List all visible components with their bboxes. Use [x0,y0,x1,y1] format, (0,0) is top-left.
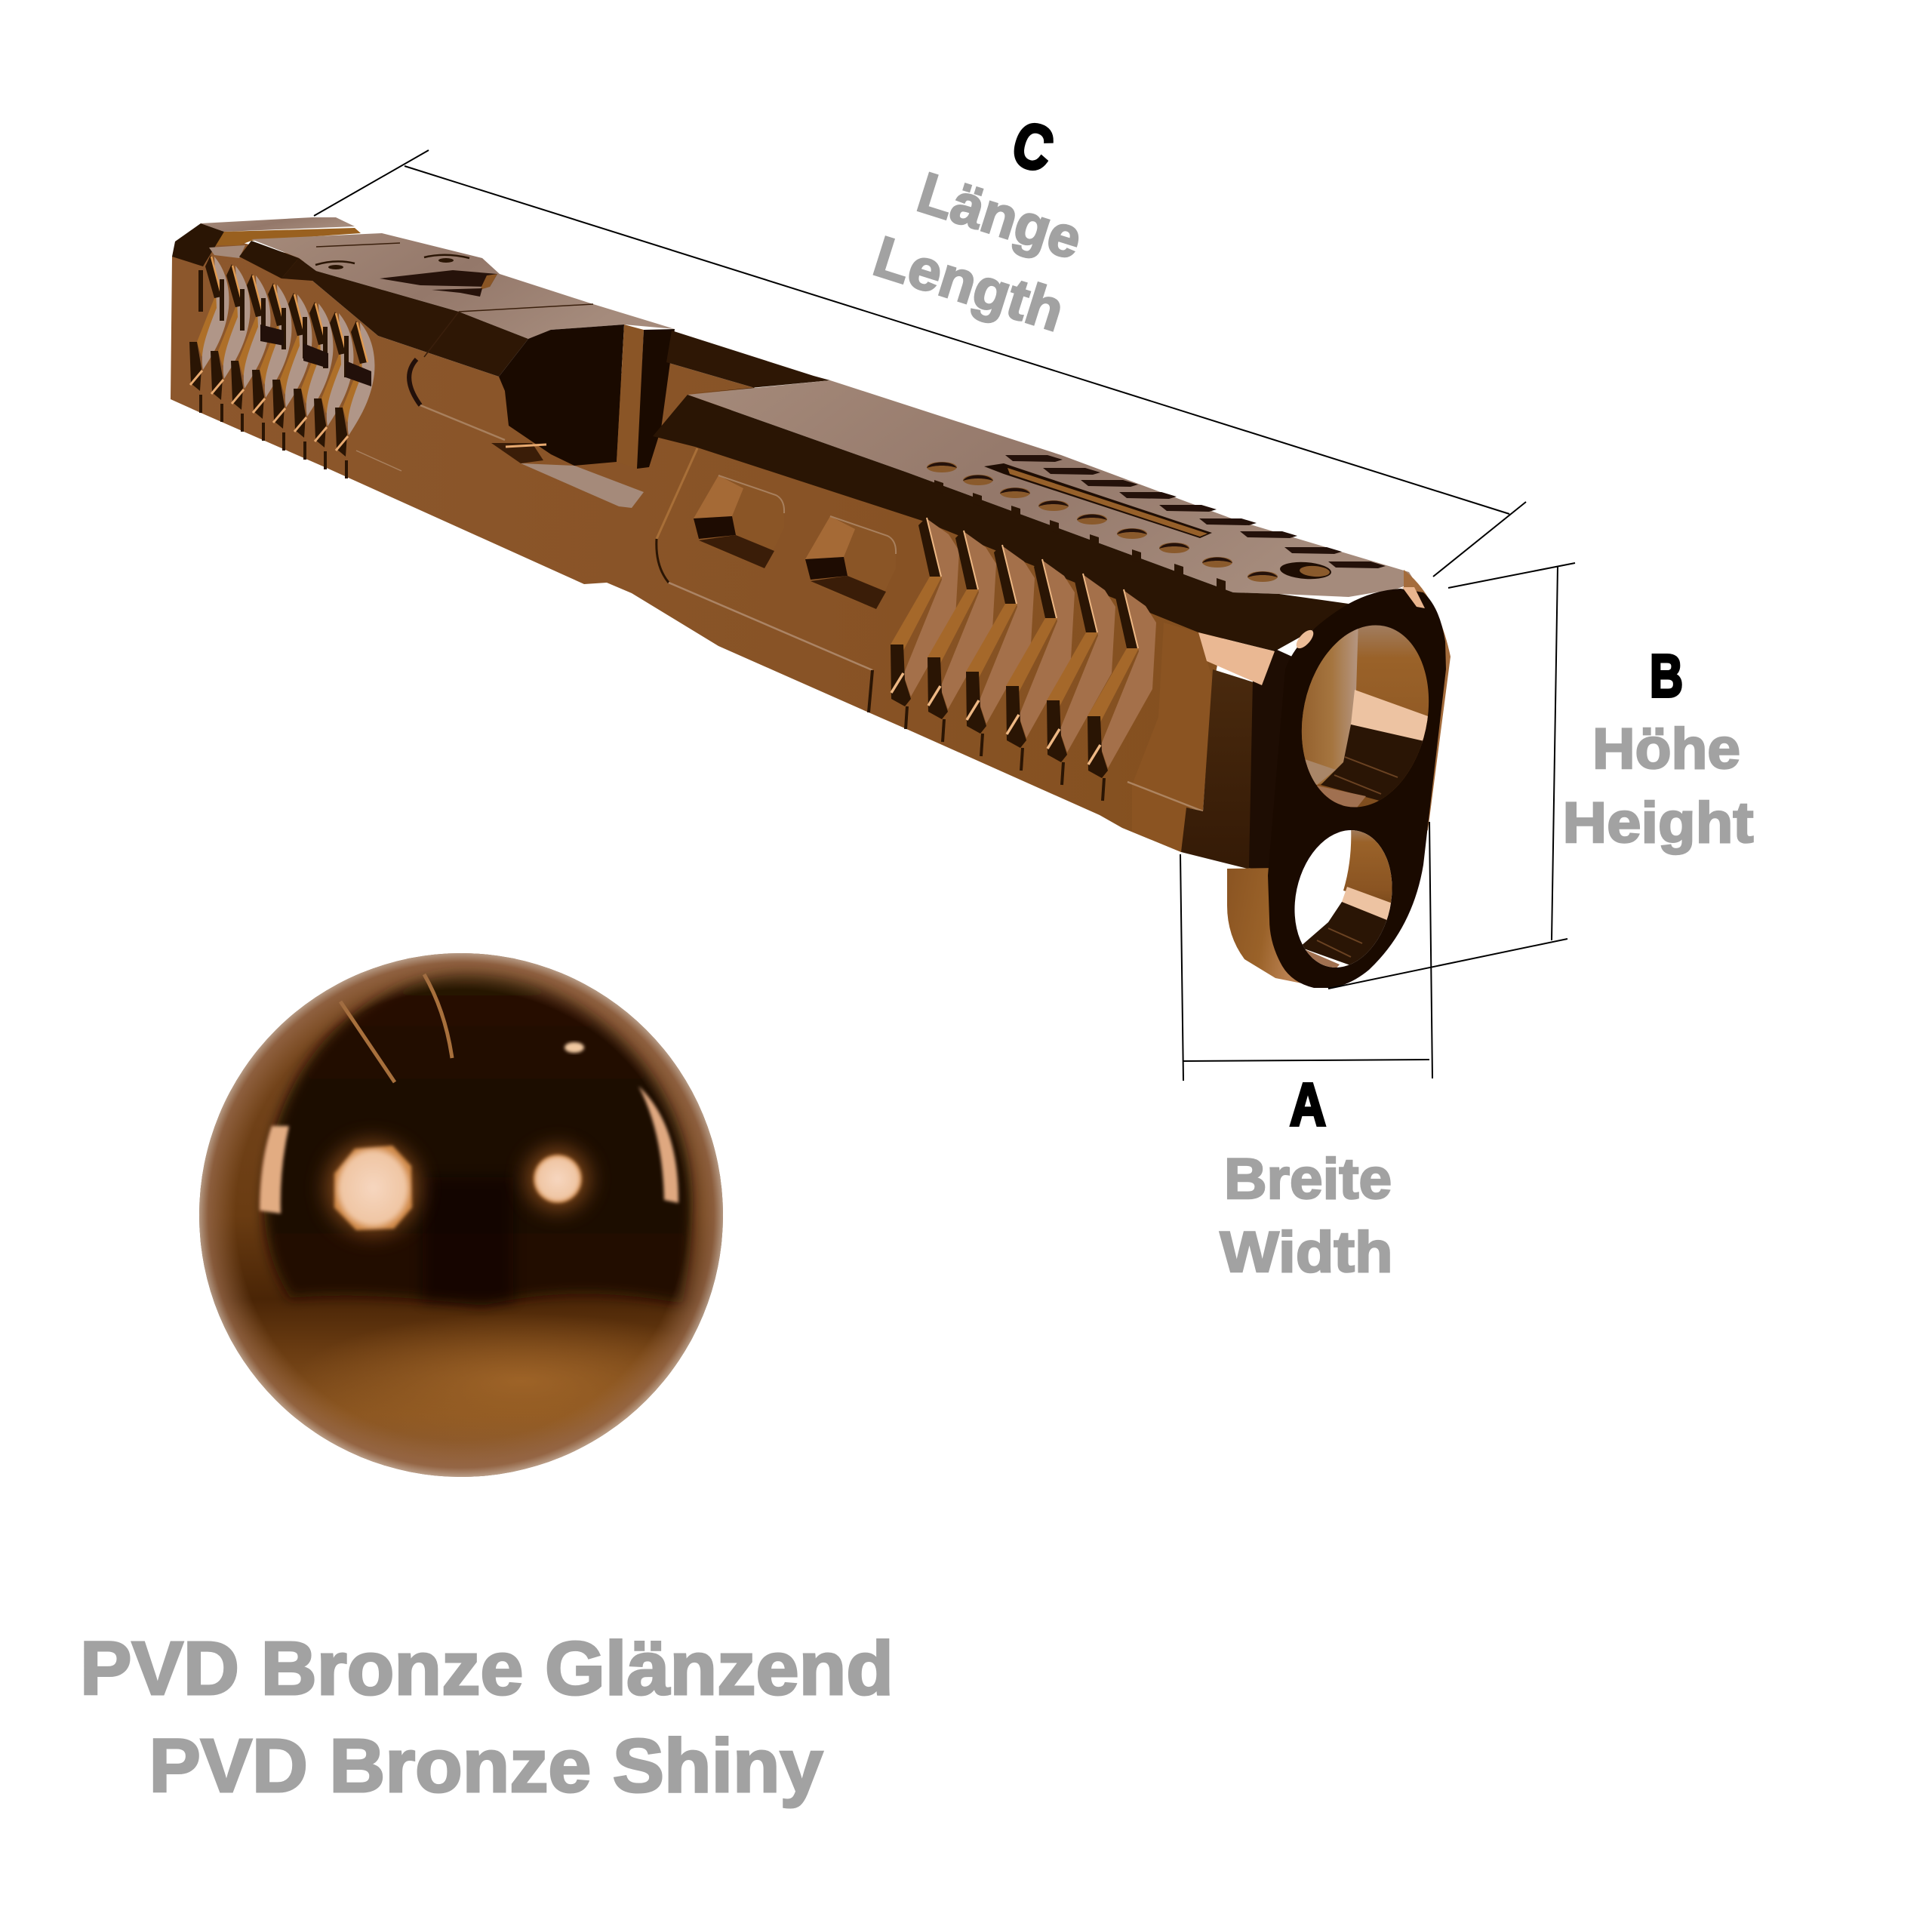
label Höhe: Höhe [1592,717,1740,781]
rear top face [201,217,355,232]
panel line [1128,782,1203,811]
dark room reflection [264,971,693,1306]
width line A [1180,822,1432,1081]
top highlight [1402,587,1425,608]
corner highlight [1294,627,1316,651]
round light [534,1155,582,1203]
ceiling light streaks [340,974,452,1082]
top seam lines [316,243,593,357]
label C: C [1004,107,1061,186]
round light glow [526,1147,589,1211]
caption English: PVD Bronze Shiny [149,1724,823,1808]
height line B [1328,563,1575,989]
octagon softbox glow [326,1141,420,1235]
rear dark chamfer [172,223,224,266]
length line C [314,150,1526,577]
ejection port [499,325,624,466]
front top face [688,380,1415,597]
dimension lines [314,150,1575,1081]
rear upper top face [251,233,675,339]
top serration slots [927,455,1386,592]
label B: B [1650,642,1683,709]
front plate [1268,589,1446,988]
muzzle block dark seam [1249,649,1292,875]
side panel outline [657,448,872,712]
left bar light [260,1126,289,1214]
octagon softbox [334,1146,412,1230]
rear serrations [189,255,374,478]
lower bore [1294,830,1392,968]
main slide render [171,217,1451,988]
muzzle block [1181,669,1268,869]
caption German: PVD Bronze Glänzend [80,1626,894,1711]
port divider copper strip [617,325,644,469]
optic cut [315,255,497,297]
upper bore [1301,625,1429,808]
right bar light [638,1086,678,1203]
front serrations [891,518,1156,801]
rear side chamfer [281,258,528,377]
label Breite: Breite [1224,1147,1392,1211]
rear notch taupe [209,245,245,258]
bronze sample sphere [199,953,748,1477]
label Länge: Länge [910,161,1089,272]
rear second chamfer [239,241,299,278]
small ceiling light [565,1042,584,1053]
label Length: Length [866,224,1072,344]
front chamfer [653,395,1349,651]
rear orange band [214,228,361,245]
label Width: Width [1220,1220,1393,1284]
front copper panel [1132,623,1213,852]
under lug [1227,868,1302,983]
label Height: Height [1562,791,1754,855]
port divider dark strip [637,329,675,469]
side window two [805,516,896,609]
light chamfer [1198,632,1275,685]
sphere rim [199,953,723,1477]
copper edge behind front plate [1404,570,1451,845]
floor glow [343,1321,670,1423]
doorway shadow [423,1177,513,1302]
side window one [694,475,784,568]
label A: A [1290,1071,1326,1138]
mid dark chamfer [666,331,830,394]
rear side window cut [356,359,505,471]
slide side face [171,234,1223,852]
port lower reflections [491,443,644,508]
